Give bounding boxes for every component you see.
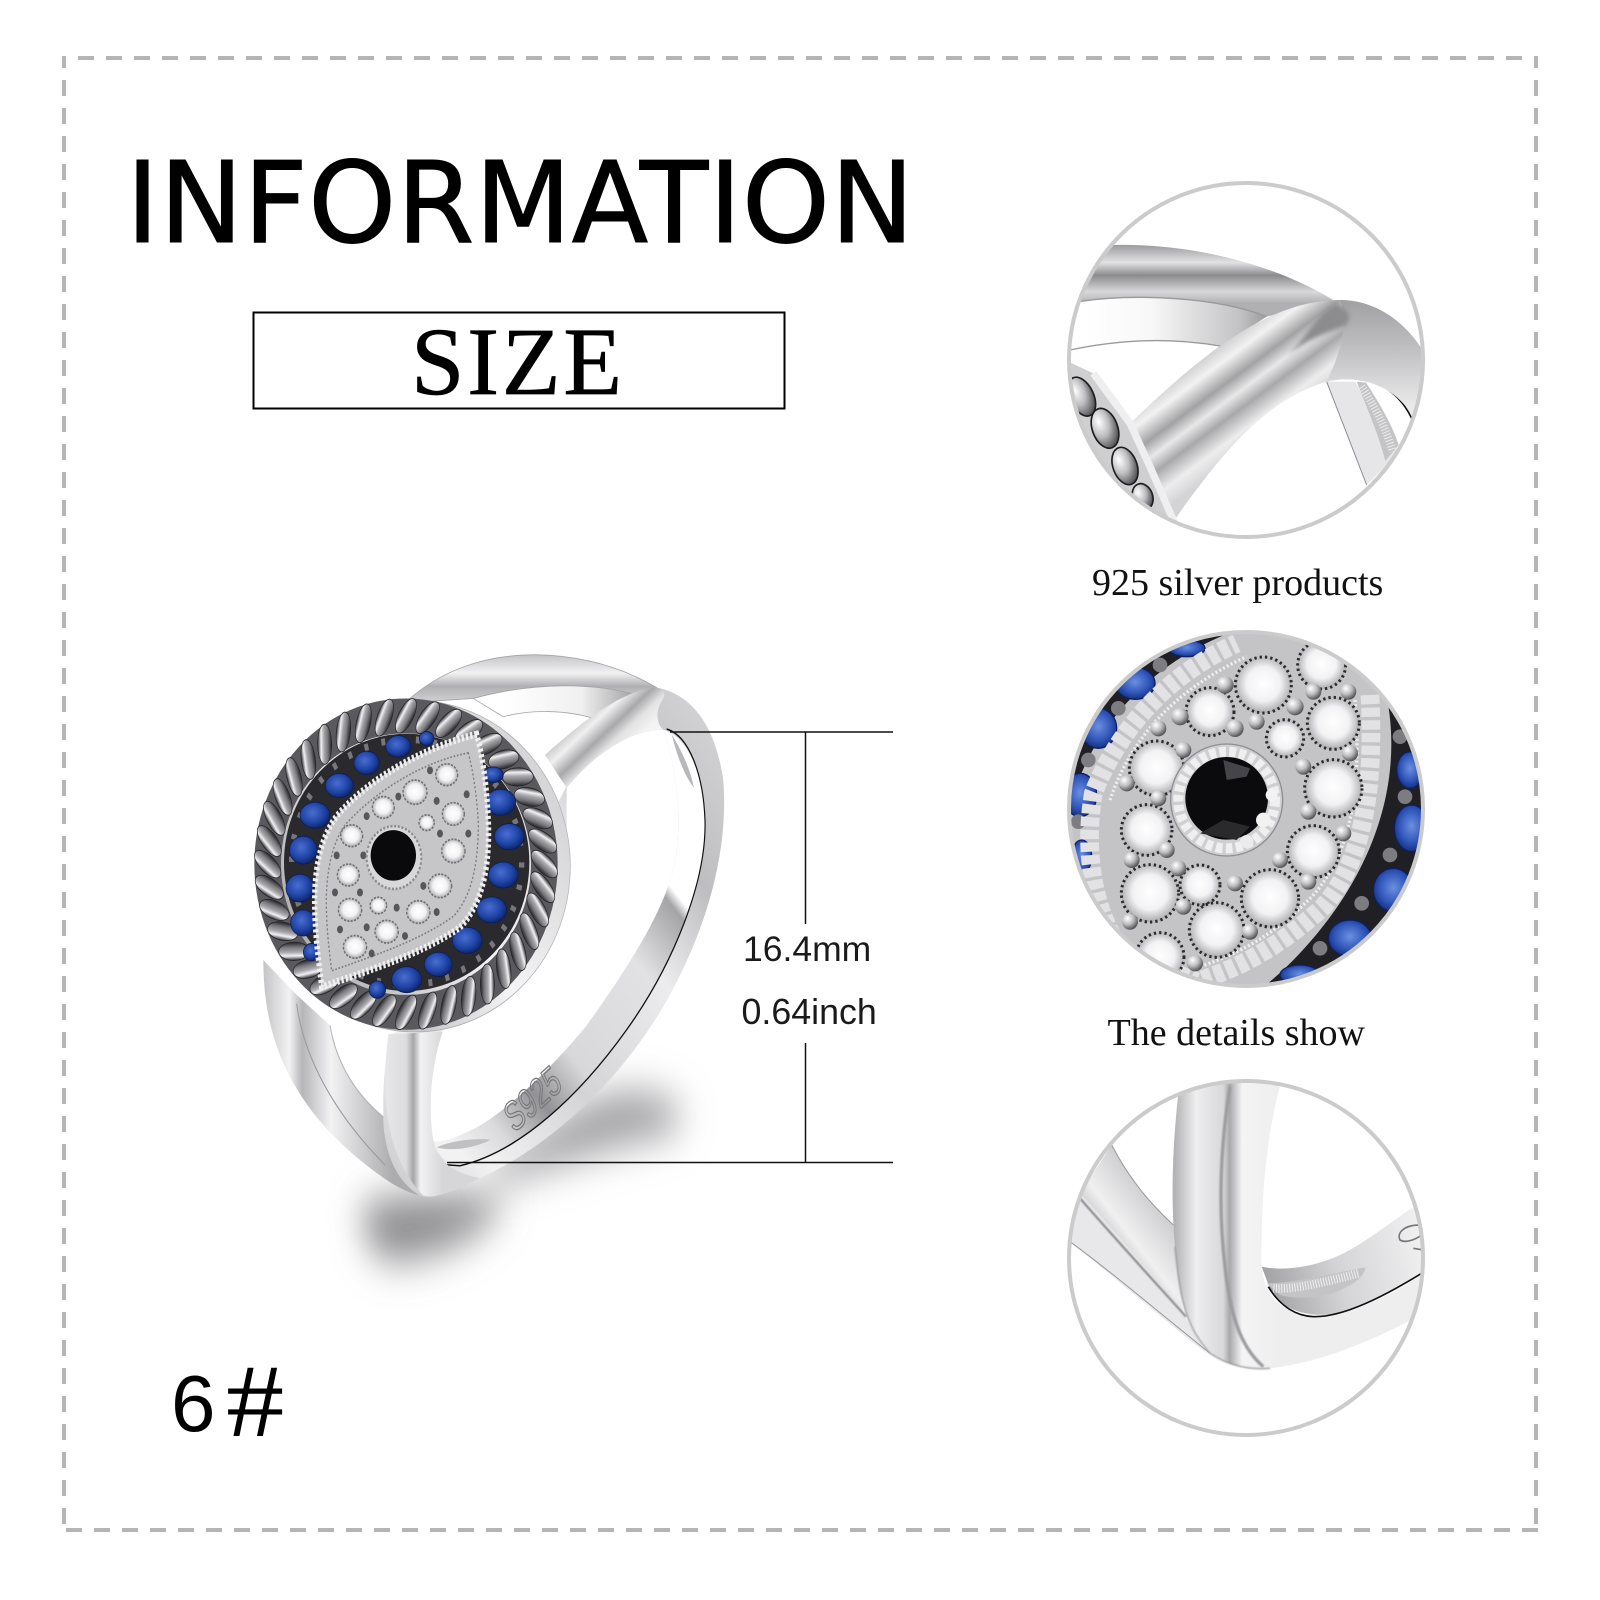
left strands xyxy=(1080,1145,1183,1313)
inner wall xyxy=(433,730,705,1166)
upper band xyxy=(1080,245,1333,317)
blue gems xyxy=(1063,640,1429,985)
dimension text: 16.4mm xyxy=(743,929,871,969)
black prongs xyxy=(1071,658,1412,956)
title: INFORMATION xyxy=(126,139,914,269)
white gems xyxy=(1121,641,1362,981)
caption: 925 silver products: 925 silver products xyxy=(1092,562,1383,604)
dark inner line xyxy=(1268,1273,1422,1317)
main band xyxy=(1173,1080,1427,1369)
ring size label xyxy=(171,1344,284,1459)
stipple xyxy=(1267,1267,1365,1298)
ring size label: # xyxy=(226,1344,284,1459)
hallmark fragment xyxy=(1399,1225,1423,1250)
shank xyxy=(383,688,724,1197)
almond eye xyxy=(315,734,489,987)
front arc xyxy=(1130,300,1425,522)
inner hole xyxy=(431,730,678,1141)
detail circle: band crossing xyxy=(1062,183,1425,537)
black pupil xyxy=(367,826,421,889)
arm xyxy=(545,688,664,788)
ring illustration xyxy=(251,655,724,1261)
ring shadow xyxy=(363,1093,682,1261)
prong dots xyxy=(332,766,471,957)
back band xyxy=(405,655,657,719)
dimension text: 0.64inch xyxy=(742,992,877,1032)
detail circle: band base xyxy=(1069,1080,1427,1435)
bead ring xyxy=(292,739,522,985)
white gems xyxy=(337,764,465,958)
detail circle: gemstones xyxy=(1063,627,1430,993)
dark bed xyxy=(284,734,529,991)
rope edge xyxy=(1071,363,1168,516)
dimension lines xyxy=(447,732,893,1162)
circle outline xyxy=(1069,183,1423,537)
dark channels xyxy=(1074,635,1224,774)
metal beads xyxy=(1119,676,1358,971)
size label box: SIZE xyxy=(411,308,622,415)
beaded rim xyxy=(1090,643,1371,982)
middle band xyxy=(1153,298,1266,346)
plate xyxy=(260,701,570,1032)
inner wall xyxy=(1262,1205,1425,1315)
dimension text xyxy=(742,929,877,1032)
inner wall xyxy=(1327,382,1398,485)
caption: The details show: The details show xyxy=(1108,1012,1366,1054)
ring size label: 6 xyxy=(171,1359,216,1448)
left double band xyxy=(263,960,480,1197)
black stone xyxy=(1185,757,1268,840)
blue gems xyxy=(286,732,524,998)
stamp S925: S925 xyxy=(498,1058,568,1142)
hallmark stipple xyxy=(437,734,694,1149)
circle outline xyxy=(1069,632,1423,986)
pupil setting xyxy=(1171,744,1283,856)
circle outline xyxy=(1069,1081,1423,1435)
size label box xyxy=(254,308,784,415)
inner edge line xyxy=(447,729,705,1166)
eye head xyxy=(251,694,570,1034)
rope border xyxy=(251,694,561,1034)
